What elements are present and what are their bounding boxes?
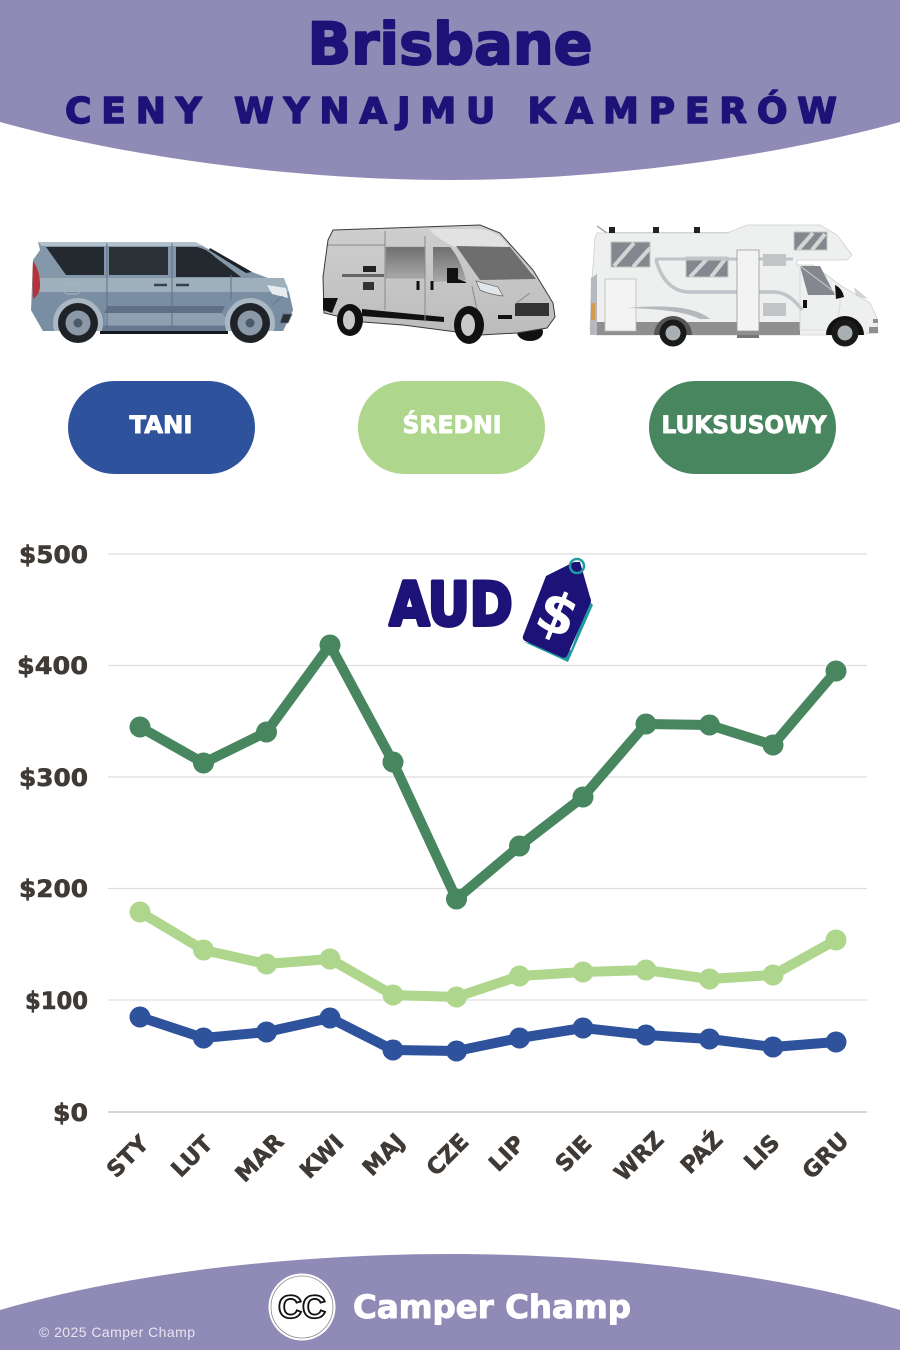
icon: price tag: $: [527, 577, 587, 652]
badge: luksusowy: [649, 381, 836, 474]
y axis labels: $500: [19, 541, 88, 569]
x axis labels: MAJ: [358, 1129, 410, 1181]
logo: Camper Champ: Camper Champ: [353, 1288, 631, 1326]
badge: luksusowy: LUKSUSOWY: [662, 411, 827, 439]
currency label: AUD: [390, 570, 512, 640]
icon: minivan: [31, 242, 293, 348]
x axis labels: WRZ: [610, 1127, 669, 1187]
x axis labels: STY: [102, 1130, 155, 1183]
badge: tani: [68, 381, 255, 474]
x axis labels: LUT: [167, 1130, 219, 1183]
badge: średni: ŚREDNI: [402, 409, 502, 439]
icon: price tag: [523, 559, 593, 662]
x axis labels: KWI: [295, 1130, 349, 1184]
y axis labels: $0: [53, 1099, 88, 1127]
chart: monthly camper rental prices: [17, 541, 867, 1188]
icon: panel van: [323, 225, 555, 344]
x axis labels: SIE: [551, 1131, 597, 1177]
copyright: © 2025 Camper Champ: [39, 1324, 195, 1340]
x axis labels: MAR: [230, 1129, 289, 1188]
x axis labels: [102, 1125, 854, 1188]
logo: Camper Champ: [268, 1274, 631, 1340]
x axis labels: LIS: [739, 1130, 785, 1176]
title: Brisbane: [308, 10, 592, 78]
y axis labels: $200: [19, 875, 88, 903]
y axis labels: [17, 541, 88, 1127]
line: budget: [130, 1006, 846, 1062]
x axis labels: GRU: [798, 1128, 854, 1184]
icon: motorhome: [590, 225, 878, 346]
subtitle: CENY WYNAJMU KAMPERÓW: [65, 90, 837, 132]
y axis labels: $300: [19, 764, 88, 792]
badge: tani: TANI: [130, 411, 192, 439]
y axis labels: $400: [17, 652, 88, 680]
y axis labels: $100: [25, 987, 88, 1015]
badge: średni: [358, 381, 545, 474]
chart gridlines: [108, 554, 867, 1112]
x axis labels: CZE: [422, 1129, 474, 1181]
line: mid: [130, 902, 846, 1008]
x axis labels: PAŹ: [674, 1125, 728, 1179]
footer banner: [0, 1254, 900, 1350]
x axis labels: LIP: [484, 1131, 530, 1177]
line: luxury: [130, 634, 846, 910]
header banner: [0, 0, 900, 180]
logo: Camper Champ: CC: [278, 1289, 326, 1325]
